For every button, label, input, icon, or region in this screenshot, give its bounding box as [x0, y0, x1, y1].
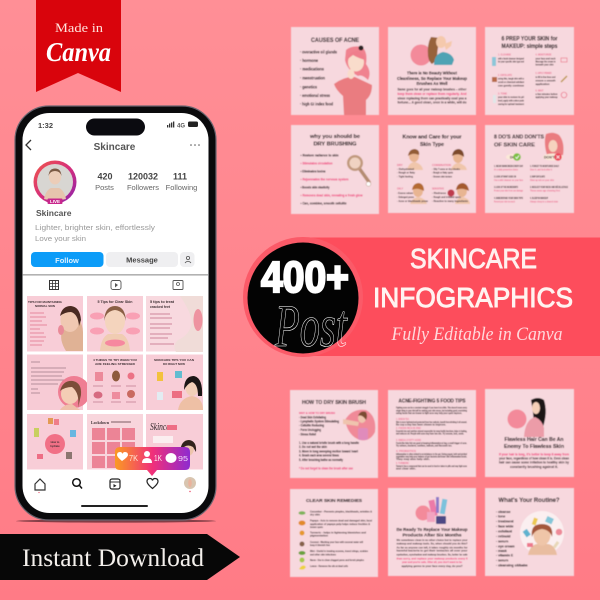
card: replace makeup after six months: harmful bacteria to get their tentacles all over your: [396, 549, 468, 553]
card: prep your skin: Massage the cream in: [536, 60, 556, 64]
card: how to dry skin brush: · Lymphatic System Stimulating: [299, 420, 339, 424]
card: what's your routine: · eye cream: [496, 544, 515, 548]
card: do's and don'ts: Over it, and look after it: [530, 168, 552, 172]
post: 4 things to try: [87, 354, 143, 410]
card: do's and don'ts: 4. SLEEP IN MAKEUP: [530, 197, 548, 200]
card: replace makeup after six months: applying germs to your face every day, do you?: [402, 564, 463, 568]
card: acne fighting food tips: 1. GREEN TEA: [396, 418, 409, 421]
card: what's your routine: [485, 488, 574, 576]
card: no beauty without cleanliness: keep them clean or replace them regularly. And: [398, 92, 467, 96]
card: know your skin type: SENSITIVE: [432, 186, 444, 190]
card: know your skin type: OILY: [397, 186, 403, 190]
card: dry brushing: • Removes dead skin, revealing a fresh glow: [300, 194, 363, 198]
card: know your skin type: · Enlarged pores: [397, 195, 414, 199]
card: know your skin type: DRY: [397, 163, 403, 167]
card: acne fighting food tips: Turmeric has a compound that can be used in food or taken in pills and may fight acne: [396, 465, 468, 468]
card: know your skin type: · Rough and irritated spots: [432, 195, 461, 199]
card: no beauty without cleanliness: There is No Beauty Without: [407, 70, 457, 76]
badge circle: [416, 506, 430, 520]
card: prep your skin: applying your makeup: [536, 95, 558, 99]
card: what's your routine: What's Your Routine?: [498, 498, 560, 504]
profile stats: [95, 172, 197, 192]
card: know your skin type: · Excess sebum: [397, 191, 413, 195]
card: know your skin type: · Dehydrated: [397, 167, 414, 171]
card: do's and don'ts: Slow up rub on your skin: [530, 179, 554, 182]
card: prep your skin: 6. WAIT: [536, 88, 544, 92]
profile buttons: [31, 252, 194, 267]
profile bio: Love your skin: [35, 234, 86, 243]
post: 5 tips for clear skin: [87, 296, 143, 352]
post: skincare tips: [146, 354, 203, 410]
card: do's and don'ts: 1. FORGET TO MOISTURIZE DAILY: [530, 165, 559, 168]
card: clear skin remedies: Coconut - Washing your face with coconut water will: [310, 540, 363, 544]
card: flawless hair: If your hair is long, it's better to keep it away from: [499, 452, 569, 456]
card: acne fighting food tips: vegetables may help your balance of gut bacteria and lower skin inflammation levels.: [396, 456, 467, 458]
card: how to dry skin brush: HOW TO DRY SKIN BRUSH: [302, 400, 366, 406]
card: dry brushing: why you should be: [309, 134, 360, 140]
card: acne fighting food tips: single thing in your diet will be making your skin worse, but including good, nourishing: [396, 410, 467, 412]
card: what's your routine: · tone: [496, 515, 505, 519]
card: replace makeup after six months: eyelashes, eyeshadow and makeup brushes. So, better be safe: [396, 552, 468, 556]
card: acne fighting food tips: 2. FOODS RICH IN ZINC: [396, 428, 421, 430]
card: do's and don'ts: Prevent your skin too much: [494, 200, 515, 204]
card: what's your routine: · treatment: [496, 520, 514, 524]
card: do's and don'ts: 1. WEAR SUNSCREEN EVERY DAY: [494, 165, 523, 168]
card: causes of acne: · genetics: [300, 84, 318, 90]
card: dry brushing: [291, 125, 379, 214]
card: flawless hair: hair can cause some irritation to healthy skin by: [499, 460, 569, 464]
banner heading: SKINCARE: [410, 243, 537, 274]
post: lockdown: [87, 414, 143, 470]
card: replace makeup after six months: [388, 488, 476, 576]
card: do's and don'ts: 4. UNDERSTAND YOUR SKIN TYPE: [494, 197, 523, 200]
profile buttons: Follow: [55, 256, 79, 265]
card: replace makeup after six months: than sorry, and replace your makeup products every 6: [396, 556, 468, 560]
card: know your skin type: · Redness: [432, 191, 446, 195]
card: how to dry skin brush: · Cellulite Reducing: [299, 424, 324, 428]
card: know your skin type: Skin Type: [420, 142, 444, 148]
stats notification pill: 7K: [129, 454, 139, 463]
card: know your skin type: · Oily T-zone or dry cheeks: [432, 167, 460, 171]
card: prep your skin: your skin to restore its pH: [498, 95, 524, 99]
card: dry brushing: • Rejuvenates the nervous system: [300, 178, 348, 182]
card: no beauty without cleanliness: Brushes As Well: [416, 81, 448, 86]
card: clear skin remedies: Papaya - Acts to remove dead and damaged skin; local: [310, 518, 372, 522]
card: how to dry skin brush: · Pores Unclogging: [299, 428, 321, 432]
stats notification pill: 1K: [154, 454, 163, 463]
profile stats: Following: [166, 183, 197, 192]
card: flawless hair: Enemy To Flawless Skin: [504, 444, 565, 450]
card: know your skin type: · Tight feeling: [397, 174, 413, 178]
card: acne fighting food tips: 5. TURMERIC: [396, 463, 409, 465]
post: 5 tips for clear skin: 5 Tips for Clear Skin: [98, 300, 132, 304]
card: how to dry skin brush: * Do not forget to clean the brush after use: [299, 466, 353, 470]
illustration: face with skincare products: [520, 511, 564, 555]
card: know your skin type: · Uneven skin texture: [432, 174, 452, 178]
card: clear skin remedies: Cucumber - Prevents pimples, blackheads, wrinkles &: [310, 510, 372, 514]
card: clear skin remedies: pigmentation: [310, 534, 328, 538]
card: clear skin remedies: Lemon - Removes the oils at dead cells: [310, 564, 348, 568]
card: acne fighting food tips: They may also help skin.: [396, 459, 430, 461]
status bar: 4G: [177, 124, 185, 130]
profile stats: Followers: [127, 183, 159, 192]
card: prep your skin: 3. TONE: [498, 92, 507, 96]
card: causes of acne: [291, 27, 379, 115]
card: prep your skin: ensure a smooth: [536, 78, 556, 82]
card: know your skin type: · Acne or blackheads prone: [397, 199, 428, 203]
card: acne fighting food tips: 4. PROBIOTICS: [396, 450, 417, 453]
profile bio: [35, 208, 155, 243]
card: prep your skin: MAKEUP: simple steps: [502, 44, 558, 50]
400+ Post badge: Post: [274, 293, 348, 359]
card: replace makeup after six months: We sometimes clean in no other choice but to replace your: [396, 538, 468, 542]
ribbon: Made in Canva: Made in: [55, 20, 104, 35]
stats notification pill: [115, 447, 190, 476]
card: acne fighting food tips: Skin is more hydrated and protected from free radicals, benefit from drinking it all around.: [396, 421, 467, 424]
card: prep your skin: 4. MOISTURIZE: [536, 52, 552, 56]
avatar with live badge: LIVE: [50, 199, 60, 204]
post: skincare tips: SKINCARE TIPS YOU CAN: [154, 358, 194, 362]
card group: bottom infographics: [290, 389, 574, 577]
card: prep your skin: using this, tough skin with a: [498, 76, 524, 80]
card: clear skin remedies: keep it blemish free: [310, 543, 330, 547]
card: know your skin type: · Rough or flaky: [397, 171, 415, 175]
card: replace makeup after six months: makeup and makeup tools. So, when should you do this?: [396, 542, 468, 546]
card: dry brushing: • Restore radiance to skin: [300, 154, 338, 158]
ribbon: Made in Canva: [36, 0, 121, 92]
card group: top infographics: [291, 27, 574, 214]
card: replace makeup after six months: Products After Six Months: [402, 532, 462, 538]
phone shadow: [16, 519, 216, 523]
card: dry brushing: • Stimulates circulation: [300, 162, 332, 166]
card: how to dry skin brush: 4. Brush each area several times: [299, 454, 339, 458]
card: replace makeup after six months: year and you're safe. After all, you don't want to be: [402, 560, 462, 564]
card: how to dry skin brush: 5. After brushing bathe as normally: [299, 458, 343, 462]
card: flawless hair: constantly brushing against it.: [510, 465, 558, 469]
card: prep your skin: application: [536, 82, 550, 86]
card: causes of acne: · medications: [300, 67, 325, 72]
card: prep your skin: for your specific skin type and: [498, 60, 524, 64]
post: tips for normal skin: TIPS FOR MAINTAINING: [28, 300, 63, 304]
card: acne fighting food tips: Be cup a day has been shown to improve.: [396, 424, 446, 426]
do badge: DO: [510, 156, 516, 160]
card: no beauty without cleanliness: [388, 27, 476, 115]
card: prep your skin: [485, 27, 574, 115]
instant download arrow banner: [0, 534, 240, 580]
card: do's and don'ts: OF SKIN CARE: [494, 142, 536, 148]
profile stats: 111: [173, 172, 187, 182]
card: dry brushing: • Boosts skin elasticity: [300, 186, 330, 190]
banner strip: [295, 238, 600, 356]
card: prep your skin: scrub or chemical exfoliant: [498, 80, 524, 84]
card: acne fighting food tips: eating foods that are known to fight acne may help your spots improve.: [396, 412, 462, 415]
card: no beauty without cleanliness: Same goes for all your makeup brushes – either: [398, 88, 467, 92]
card: clear skin remedies: application of papaya pulp helps reduce freckles &: [310, 522, 370, 526]
card: what's your routine: · mask: [496, 549, 507, 553]
illustration: makeup products: [427, 497, 447, 524]
central banner: [243, 237, 600, 359]
card: dry brushing: DRY BRUSHING: [314, 142, 357, 148]
card: do's and don'ts: Use a mild cleanser on your face: [494, 179, 524, 182]
stats notification pill: 95: [178, 454, 188, 463]
post: lockdown: Lockdown: [91, 420, 109, 425]
profile buttons: Message: [126, 256, 158, 264]
card: what's your routine: · face wide: [496, 524, 513, 528]
card: acne fighting food tips: ACNE-FIGHTING 5 FOOD TIPS: [398, 398, 466, 404]
card: dry brushing: • Eliminates toxins: [300, 170, 326, 174]
card: clear skin remedies: brown spots: [310, 525, 323, 529]
card: prep your skin: level, apply with cotton pads: [498, 98, 524, 102]
card: know your skin type: Know and Care for your: [402, 134, 462, 140]
illustration: woman with long black hair: [524, 398, 546, 437]
post: tips to treat cracked feet: 5 tips to treat: [150, 299, 175, 304]
card: what's your routine: · exfoliant: [496, 530, 513, 534]
card: prep your skin: with a facial cleanser designed: [497, 56, 524, 60]
banner heading: [373, 243, 573, 313]
card: flawless hair: [485, 389, 574, 477]
card: replace makeup after six months: As far as anyone can tell, it takes roughly six months for: [396, 545, 468, 549]
card: causes of acne: · high GI index food: [300, 102, 333, 107]
card: acne fighting food tips: and reduces oil. People with acne may have low zinc. Try sesame, nuts, seeds.: [396, 432, 464, 436]
card: acne fighting food tips: Foods like fatty fish are good at keeping inflammation at bay, a small trigger of acne.: [396, 442, 467, 445]
post: about care: [27, 354, 90, 410]
card: how to dry skin brush: 2. Do not wet the skin: [299, 445, 327, 449]
post: how to keep skin hydrated: How to: [51, 440, 60, 444]
card: know your skin type: · Rough or flaky spots: [432, 171, 453, 175]
post: how to keep skin hydrated: [27, 414, 83, 470]
profile bio: Lighter, brighter skin, effortlessly: [35, 223, 155, 232]
ribbon: Made in Canva: Canva: [46, 37, 111, 67]
profile stats: 420: [97, 172, 113, 182]
card: prep your skin: a few minutes before: [536, 92, 558, 96]
post grid thumbnails: [27, 296, 203, 470]
post: tips to treat cracked feet: cracked feet: [150, 304, 171, 309]
post: 4 things to try: 4 THINGS TO TRY WHEN YOU: [93, 358, 137, 362]
card: do's and don'ts: 2. SKIP EXFOLIATE: [530, 176, 545, 178]
post: skincare script: Skincare: [150, 422, 176, 433]
card: how to dry skin brush: 3. Move in long sweeping motion toward heart: [299, 449, 359, 453]
card: no beauty without cleanliness: fortune... A good clean, once in a while, will do: [398, 100, 467, 104]
post: 4 things to try: ARE FEELING STRESSED: [95, 362, 135, 366]
card: flawless hair: Flawless Hair Can Be An: [504, 437, 564, 443]
status bar: [38, 118, 198, 136]
remedy icons: [298, 511, 306, 570]
card: do's and don'ts: These areas age showing first: [530, 190, 560, 192]
card: how to dry skin brush: · Dead Skin Exfoliating: [299, 415, 326, 419]
banner ring: [243, 237, 363, 357]
card: know your skin type: · Reactive to many ingredients: [432, 199, 468, 203]
card: know your skin type: COMBINATION: [432, 163, 451, 167]
profile stats: Posts: [95, 183, 114, 192]
card: prep your skin: 2. EXFOLIATE: [498, 73, 512, 77]
card: acne fighting food tips: Inflammation is often related to an imbalance in the gut. Eating yogurt, kefir and pickled: [396, 453, 467, 456]
card: how to dry skin brush: WHY & HOW TO DRY BRUSH: [299, 411, 335, 415]
card: prep your skin: 5. APPLY PRIMER: [536, 71, 552, 75]
instant download arrow banner: Instant Download: [22, 545, 204, 572]
illustration: dry brush: [347, 155, 371, 186]
card: causes of acne: · hormone: [300, 58, 319, 63]
card: prep your skin: beneath your chin: [536, 62, 554, 66]
illustration: woman with lipstick: [428, 36, 454, 65]
phone mockup: [15, 106, 216, 523]
card: prep your skin: 6 PREP YOUR SKIN for: [502, 36, 558, 42]
post: how to keep skin hydrated: hydrate: [50, 444, 60, 448]
card: what's your routine: · serum: [496, 540, 508, 544]
card: replace makeup after six months: Be Ready To Replace Your Makeup: [396, 527, 468, 533]
avatar with live badge: [34, 160, 76, 204]
card: clear skin remedies: Neem - Use to clean clogged pores and fermit pimples: [310, 558, 364, 562]
card: no beauty without cleanliness: since replacing them can practically cost you a: [398, 96, 467, 100]
profile header: [26, 140, 200, 153]
illustration: woman dry brushing: [343, 410, 375, 440]
profile stats: 120032: [128, 172, 158, 182]
card: how to dry skin brush: 1. Use a natural bristle brush with a long handle: [299, 441, 359, 445]
card: dry brushing: • Can, combine, smooth cellulite: [300, 202, 346, 206]
post: tips for normal skin: NORMAL SKIN: [35, 304, 55, 308]
card: do's and don'ts: 3. NEGLECT YOUR NECK AND DÉCOLLETAGE: [530, 186, 568, 189]
profile header: Skincare: [94, 142, 136, 153]
card: causes of acne: · menstruation: [300, 76, 325, 80]
card: what's your routine: · cleansing oil/balm: [496, 564, 527, 568]
card: clear skin remedies: and other skin infections: [310, 552, 336, 556]
card: acne fighting food tips: [388, 390, 476, 477]
card: what's your routine: · serum: [496, 559, 508, 563]
card: clear skin remedies: Mint - Useful in treating eczema, insect stings, scabies: [310, 549, 368, 553]
card: do's and don'ts: [485, 125, 574, 213]
card: clear skin remedies: dry skin: [310, 512, 320, 516]
card: causes of acne: · emotional stress: [300, 93, 331, 98]
step icons: [492, 57, 567, 103]
card: do's and don'ts: 3. LOOK AT THE INGREDIENTS: [494, 186, 518, 189]
card: acne fighting food tips: Fighting acne can be a constant struggle if you have it at a little. This doesn't mean every: [396, 406, 468, 410]
banner heading: INFOGRAPHICS: [373, 282, 573, 313]
card: clear skin remedies: [290, 489, 378, 577]
profile tabs: [22, 274, 208, 290]
dont badge: DON'T: [544, 156, 556, 160]
profile bio: Skincare: [36, 208, 72, 218]
post: tips for normal skin: [27, 296, 83, 352]
card: what's your routine: · retinoid: [496, 534, 511, 538]
status bar: 1:32: [38, 121, 53, 130]
card: what's your routine: · cleanse: [496, 510, 511, 514]
card: acne fighting food tips: Essential zinc and nutrition mineral responsible for many bodily functions, helps in healing,: [396, 430, 467, 433]
post: skincare tips: DO RIGHT NOW: [163, 362, 185, 366]
card: do's and don'ts: Always sleep in a cleared state: [530, 200, 559, 204]
illustration: girl with pink hair: [334, 46, 372, 115]
post: skincare script: [146, 414, 203, 470]
illustration: girl in towel: [545, 133, 564, 158]
illustration: four skin type faces: [407, 149, 470, 204]
card: do's and don'ts: 2. LOOK AT WHAT GOES ON: [494, 176, 516, 178]
phone screen: [22, 113, 208, 513]
card: causes of acne: · overactive oil glands: [300, 50, 338, 54]
card: what's your routine: · vitamin E: [496, 554, 514, 558]
card: prep your skin: your face and neck: [536, 56, 556, 60]
card: how to dry skin brush: · Stress Relief: [299, 432, 317, 436]
card: acne fighting food tips: and clear skin.: [396, 468, 416, 470]
card: how to dry skin brush: [290, 390, 378, 478]
badge circle: [410, 44, 432, 66]
card: acne fighting food tips: 3. OMEGA-3 FATTY ACIDS: [396, 439, 421, 442]
card: prep your skin: 1. CLEANSE: [498, 52, 511, 56]
phone frame: [15, 106, 216, 520]
card: know your skin type: [388, 125, 476, 213]
card: do's and don'ts: it's a daily prevention choice: [494, 168, 518, 172]
bottom navigation: [35, 477, 196, 507]
post: tips to treat cracked feet: [146, 296, 203, 352]
card: prep your skin: can gently continue: [498, 84, 525, 88]
card: no beauty without cleanliness: Cleanliness, So Replace Your Makeup: [397, 76, 467, 81]
card: flawless hair: your face, regardless of how clean it is. Even clean: [499, 456, 569, 460]
card: do's and don'ts: 8 DO'S AND DON'TS: [494, 134, 545, 140]
400+ Post badge: [248, 242, 358, 359]
card: prep your skin: to fill in fine lines and: [536, 75, 556, 79]
card: clear skin remedies: Turmeric - helps in lightening blemishes and: [310, 530, 366, 534]
card: do's and don'ts: Protect your skin from sun damage: [494, 190, 523, 192]
card: prep your skin: saving for optimal treatment: [498, 102, 524, 106]
banner subtitle: Fully Editable in Canva: [391, 324, 562, 345]
card: causes of acne: CAUSES OF ACNE: [311, 37, 359, 44]
badge circle: [508, 410, 526, 428]
400+ Post badge: 400+: [261, 253, 349, 302]
card: clear skin remedies: CLEAR SKIN REMEDIES: [306, 498, 363, 504]
card: acne fighting food tips: Try salmon, mackerel, sardines, walnuts, and flaxseeds too.: [396, 444, 452, 448]
